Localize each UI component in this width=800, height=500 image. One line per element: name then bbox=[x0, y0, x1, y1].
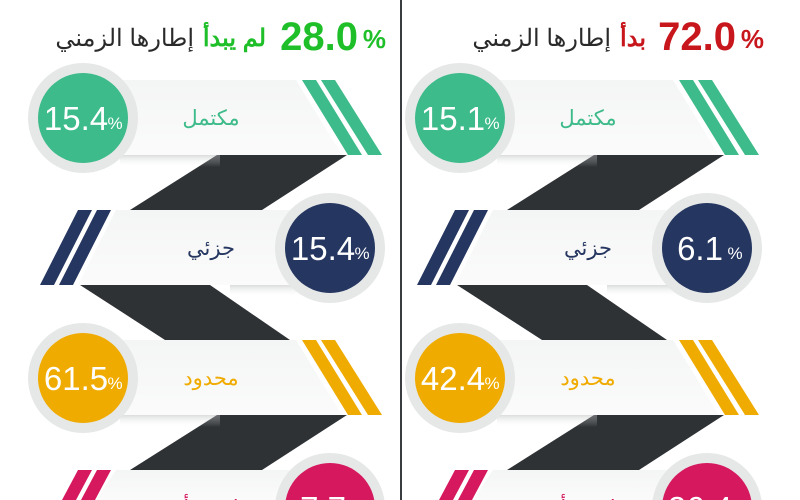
ribbon: partial: 15.4 bbox=[291, 230, 355, 267]
divider bbox=[400, 0, 402, 500]
panel: started timeline bbox=[405, 63, 762, 500]
ribbon: partial bbox=[40, 193, 385, 303]
ribbon: complete: 15.4 bbox=[44, 100, 108, 137]
connector 1 bbox=[130, 155, 347, 210]
title: right panel: بدأ bbox=[620, 20, 646, 52]
ribbon: limited: محدود bbox=[183, 367, 239, 391]
title: right panel: % bbox=[741, 24, 764, 54]
ribbon: limited: % bbox=[484, 374, 500, 393]
ribbon: complete: % bbox=[484, 114, 500, 133]
ribbon: partial: جزئي bbox=[187, 237, 235, 261]
ribbon: limited: 42.4 bbox=[421, 360, 485, 397]
ribbon: partial bbox=[417, 193, 762, 303]
ribbon: complete: % bbox=[107, 114, 123, 133]
ribbon: complete: مكتمل bbox=[559, 107, 617, 130]
ribbon: complete bbox=[28, 63, 382, 173]
ribbon: complete: مكتمل bbox=[182, 107, 240, 130]
ribbon: partial: % bbox=[727, 244, 743, 263]
ribbon: partial: 6.1 bbox=[677, 230, 723, 267]
title: right panel: 72.0 bbox=[658, 15, 736, 59]
ribbon: limited: محدود bbox=[560, 367, 616, 391]
title: left panel: 28.0 bbox=[280, 15, 358, 59]
connector 1 bbox=[507, 155, 724, 210]
ribbon: complete bbox=[405, 63, 759, 173]
ribbon: complete: 15.1 bbox=[421, 100, 485, 137]
title: right panel bbox=[474, 22, 764, 52]
ribbon: partial: % bbox=[354, 244, 370, 263]
connector 2 bbox=[80, 285, 290, 340]
ribbon: not started bbox=[62, 453, 385, 500]
connector 3 bbox=[507, 415, 724, 470]
title: left panel: إطارها الزمني bbox=[55, 25, 194, 52]
ribbon: limited bbox=[405, 323, 759, 433]
title: left panel: % bbox=[363, 24, 386, 54]
ribbon: limited: 61.5 bbox=[44, 360, 108, 397]
connector 3 bbox=[130, 415, 347, 470]
connector 2 bbox=[457, 285, 667, 340]
ribbon: limited bbox=[28, 323, 382, 433]
ribbon: partial: جزئي bbox=[564, 237, 612, 261]
panel: not started timeline bbox=[28, 63, 385, 500]
ribbon: limited: % bbox=[107, 374, 123, 393]
title: left panel: لم يبدأ bbox=[203, 20, 266, 53]
ribbon: not started bbox=[439, 453, 762, 500]
title: right panel: إطارها الزمني bbox=[472, 25, 611, 52]
title: left panel bbox=[56, 22, 386, 52]
